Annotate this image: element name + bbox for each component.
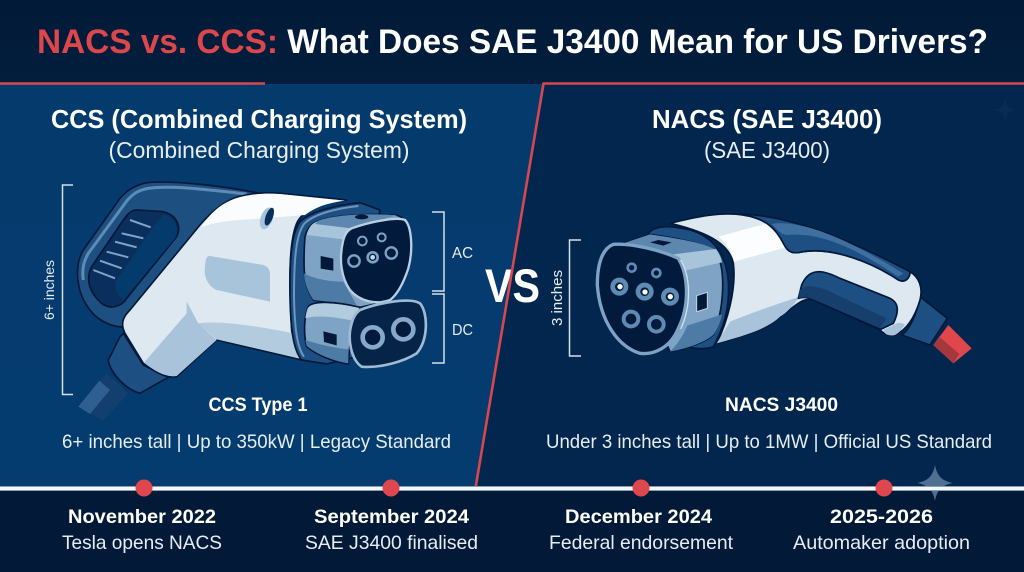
milestone: December 2024: December 2024 xyxy=(565,506,712,528)
caption: NACS: Under 3 inches tall | Up to 1MW | Official US Standard xyxy=(546,431,992,453)
panel: CCS background xyxy=(0,84,545,488)
bracket: AC: AC xyxy=(452,245,473,262)
sparkle: upper right xyxy=(994,97,1016,123)
cable, handle and body xyxy=(78,182,347,421)
timeline line xyxy=(0,486,1024,491)
milestone: September 2024 xyxy=(305,506,478,554)
sparkle: timeline xyxy=(917,465,953,501)
footer band xyxy=(0,488,1024,572)
bracket: 6+ inches xyxy=(41,185,73,394)
heading: NACS: NACS (SAE J3400) xyxy=(652,104,882,134)
heading: CCS xyxy=(51,104,467,163)
milestone: December 2024 xyxy=(549,506,734,554)
bracket: DC: DC xyxy=(452,322,473,339)
title: NACS vs. CCS: What Does SAE J3400 Mean for US Drivers? xyxy=(37,23,988,61)
milestone: November 2022: November 2022 xyxy=(68,506,216,528)
caption: NACS xyxy=(546,395,992,453)
icon: CCS connector xyxy=(78,182,426,421)
red divider accent xyxy=(0,84,1024,488)
VS label: VS xyxy=(485,259,540,312)
icon: NACS connector xyxy=(597,214,972,363)
bracket: DC xyxy=(432,294,473,363)
heading: NACS xyxy=(652,104,882,163)
connector head xyxy=(597,227,729,354)
heading: NACS: (SAE J3400) xyxy=(704,137,830,163)
milestone: 2025-2026: 2025-2026 xyxy=(830,506,933,528)
milestone: November 2022 xyxy=(62,506,222,554)
milestone: September 2024: September 2024 xyxy=(314,506,469,528)
milestone: 2025-2026: Automaker adoption xyxy=(793,532,970,554)
milestone: September 2024: SAE J3400 finalised xyxy=(305,532,478,554)
connector heads xyxy=(290,203,426,367)
header band xyxy=(0,0,1024,84)
timeline markers xyxy=(136,480,892,496)
bracket: AC xyxy=(432,212,473,291)
caption: NACS: NACS J3400 xyxy=(725,395,838,416)
milestone: November 2022: Tesla opens NACS xyxy=(62,532,222,554)
caption: CCS: CCS Type 1 xyxy=(208,395,308,416)
heading: CCS: CCS (Combined Charging System) xyxy=(51,104,467,134)
heading: CCS: (Combined Charging System) xyxy=(108,137,410,163)
panel: NACS background xyxy=(476,84,1024,488)
cable end, body and grips xyxy=(670,214,972,363)
milestone: 2025-2026 xyxy=(793,506,970,554)
caption: CCS xyxy=(62,395,451,453)
milestone: December 2024: Federal endorsement xyxy=(549,532,734,554)
bracket: 6+ inches: 6+ inches xyxy=(41,260,57,320)
caption: CCS: 6+ inches tall | Up to 350kW | Legacy Standard xyxy=(62,431,451,453)
bracket: 3 inches xyxy=(549,240,581,356)
bracket: 3 inches: 3 inches xyxy=(549,270,566,326)
